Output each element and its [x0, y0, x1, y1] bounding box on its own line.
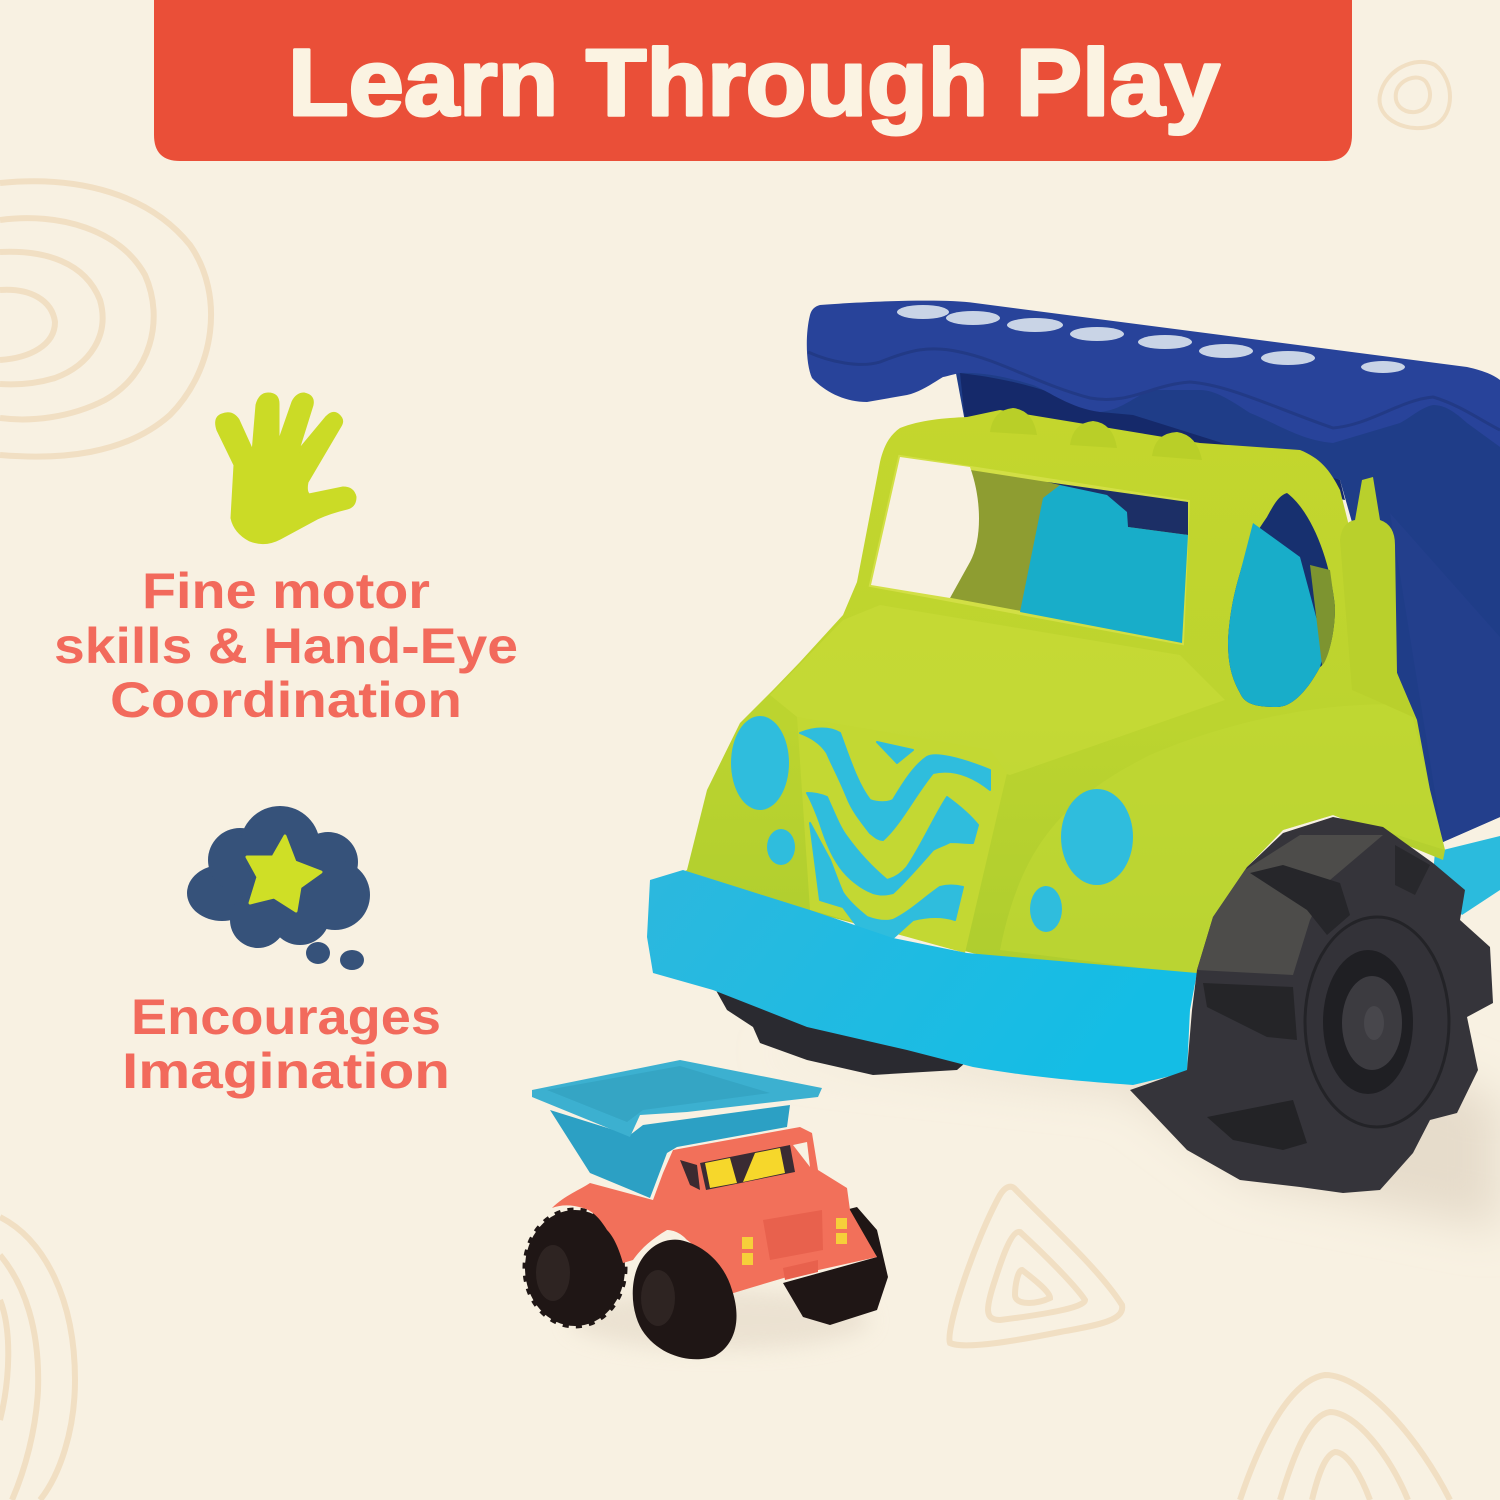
small bed body	[550, 1105, 790, 1198]
hood highlight	[770, 605, 1225, 775]
front bumper	[647, 870, 1197, 1085]
icon: thought cloud with star	[187, 806, 370, 970]
exhaust stack	[1340, 477, 1415, 718]
grille waves	[800, 728, 990, 938]
roof knobs	[990, 408, 1202, 460]
dump bed top lip	[807, 301, 1500, 447]
text: fine motor	[54, 563, 518, 728]
windscreen opening	[871, 457, 1188, 643]
small cab windows	[680, 1160, 700, 1190]
small cab	[552, 1127, 877, 1295]
small bed rim	[532, 1060, 822, 1137]
title: Learn Through Play	[288, 30, 1220, 136]
small grille and lights	[763, 1210, 823, 1260]
text: fine motor: Fine motor	[142, 563, 430, 619]
text: imagination: Encourages	[131, 989, 441, 1045]
rear dump bed	[955, 368, 1500, 842]
text: fine motor: skills & Hand-Eye	[54, 618, 518, 674]
small wheels	[525, 1210, 625, 1326]
small orange dump truck	[525, 1060, 888, 1359]
lip holes	[897, 305, 1405, 373]
text: imagination	[122, 989, 450, 1099]
front lower tyre	[713, 980, 980, 1075]
ground shadows	[570, 1050, 1500, 1350]
text: imagination: Imagination	[122, 1043, 450, 1099]
large dump truck	[647, 301, 1500, 1193]
text: fine motor: Coordination	[110, 672, 462, 728]
large wheel	[1130, 817, 1493, 1193]
headlights	[731, 716, 1133, 932]
grille panel	[797, 717, 1007, 953]
rear chassis	[1432, 836, 1500, 915]
title banner	[154, 0, 1352, 161]
right rear wheel	[783, 1207, 888, 1325]
icon: hand	[217, 394, 355, 543]
side window	[1228, 493, 1335, 707]
front small wheel	[633, 1240, 737, 1359]
cab body	[683, 410, 1445, 975]
